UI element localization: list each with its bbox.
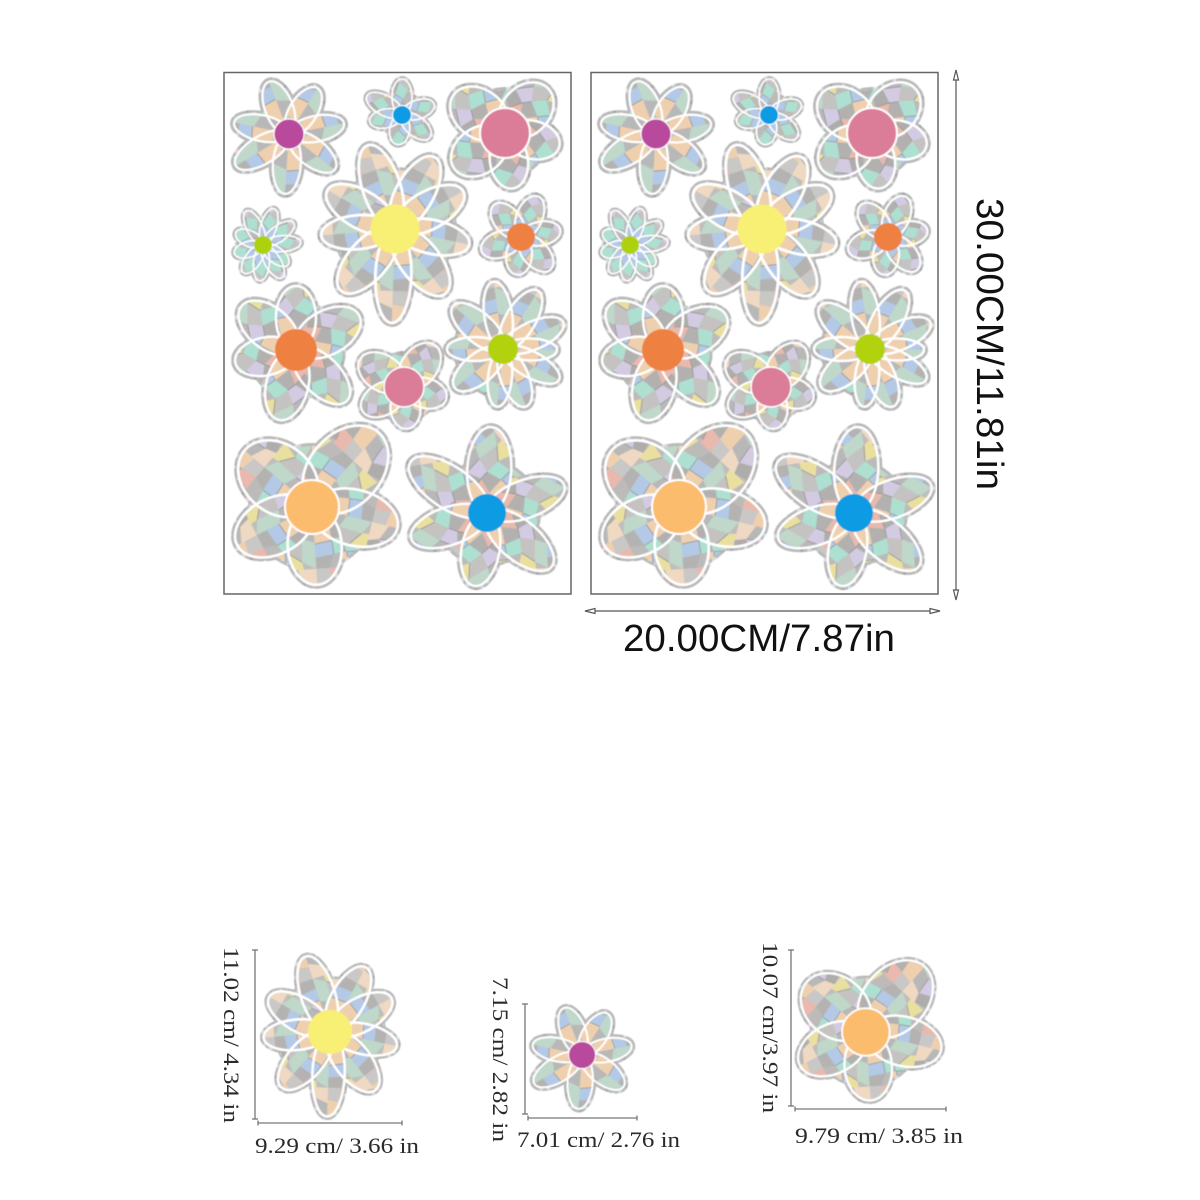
height arrow: sheet [954,70,958,600]
label: yellow flower height: 11.02 cm/ 4.34 in [219,947,244,1123]
dimension lines: yellow flower [252,950,402,1126]
label: magenta flower width: 7.01 cm/ 2.76 in [517,1127,680,1152]
panel: sticker sheet right [590,71,938,594]
single sticker: yellow flower [261,951,400,1117]
label: sheet height: 30.00CM/11.81in [968,198,1010,490]
label: magenta flower height: 7.15 cm/ 2.82 in [488,977,513,1142]
label: peach flower width: 9.79 cm/ 3.85 in [795,1123,963,1148]
label: sheet width: 20.00CM/7.87in [623,618,895,660]
dimension lines: peach flower [788,950,946,1112]
dimension lines: magenta flower [522,1004,637,1120]
single sticker: magenta flower [528,1003,634,1110]
label: yellow flower width: 9.29 cm/ 3.66 in [255,1133,419,1158]
panel: sticker sheet left [223,71,571,594]
width arrow: sheet [585,608,940,614]
label: peach flower height: 10.07 cm/3.97 in [758,942,783,1113]
single sticker: peach flower [787,945,948,1102]
